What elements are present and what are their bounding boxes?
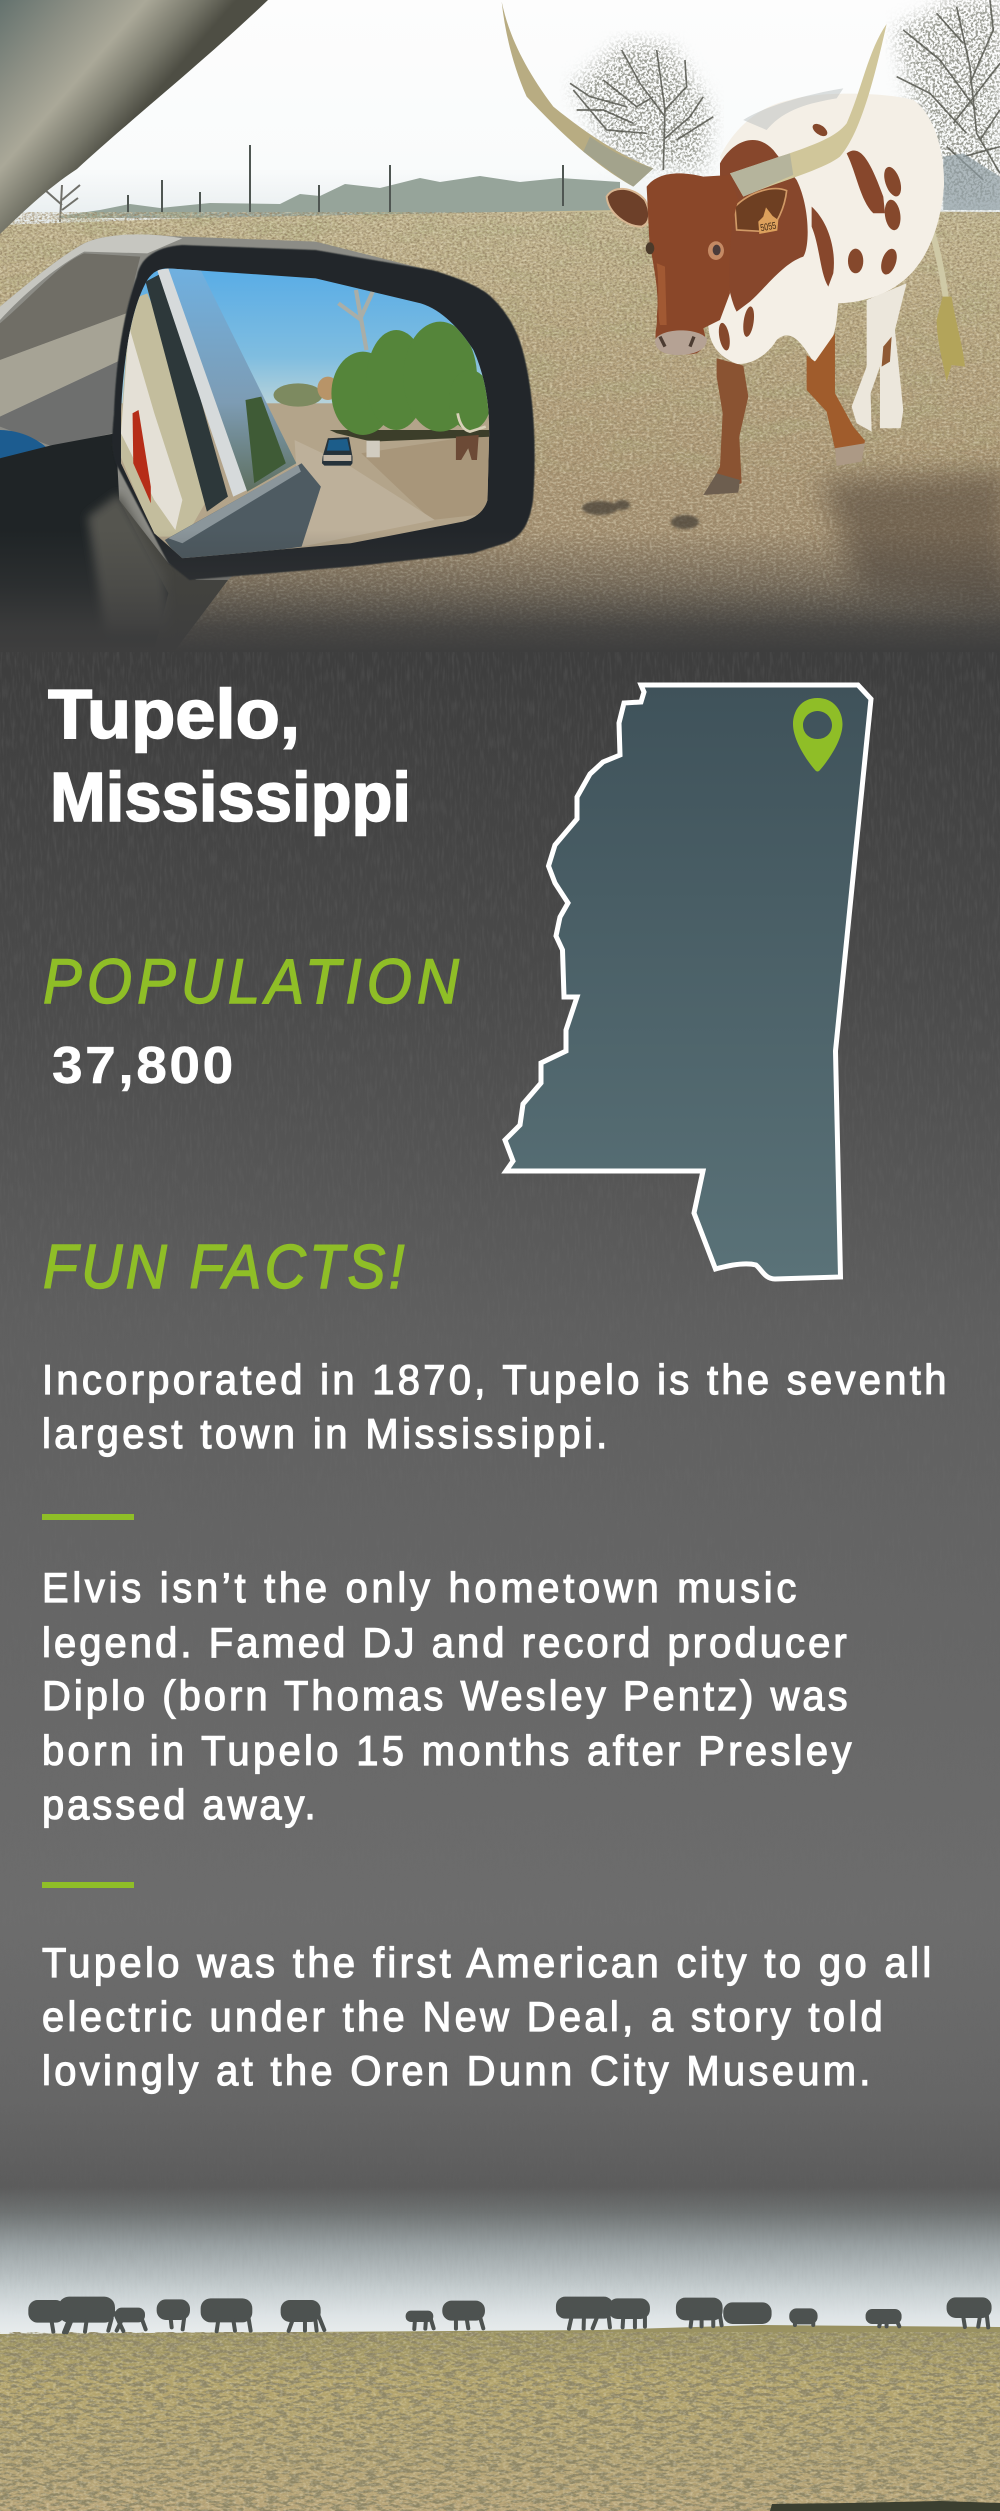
housing lower gray [0, 360, 121, 447]
bison 11 [676, 2298, 723, 2327]
population heading: POPULATION [43, 946, 459, 1017]
mirror frame [112, 245, 535, 580]
fact 2: Elvis isn’t the only hometown music [42, 1564, 796, 1611]
fun facts heading: FUN FACTS! [43, 1232, 405, 1302]
back legs [852, 283, 907, 432]
dark window strip [146, 272, 228, 512]
bison herd [28, 2297, 992, 2332]
car side window [168, 268, 296, 492]
blue trim [0, 430, 47, 458]
reflected blue car [322, 437, 352, 466]
shoulder patch [847, 150, 885, 213]
hide spots [717, 121, 904, 351]
distant building right [943, 153, 1000, 210]
cream car panel [119, 293, 207, 537]
bison 12 [723, 2302, 772, 2324]
icon: location pin [793, 698, 842, 772]
right horn base [730, 153, 793, 197]
white car panel [121, 327, 182, 530]
left horn [502, 2, 653, 187]
reflected sky [119, 267, 494, 417]
body [708, 94, 944, 364]
fact 2: born in Tupelo 15 months after Presley [42, 1727, 852, 1774]
population number: 37,800 [52, 1036, 233, 1095]
fact 1: largest town in Mississippi. [42, 1410, 607, 1457]
grass field [0, 210, 1000, 652]
fact 1: Incorporated in 1870, Tupelo is the seventh [42, 1356, 946, 1403]
nostrils [660, 337, 694, 347]
sky [0, 0, 1000, 225]
fact 2: legend. Famed DJ and record producer [42, 1619, 847, 1666]
front left hoof [703, 473, 740, 495]
map of Mississippi [505, 685, 871, 1279]
front right hoof [835, 443, 865, 466]
ear tag [758, 207, 778, 234]
side mirror [0, 234, 535, 650]
reflected longhorn [456, 413, 486, 460]
title: Tupelo, [48, 675, 300, 753]
neck patch [720, 140, 808, 312]
bison 13 [789, 2308, 818, 2325]
dark underside [0, 433, 168, 650]
prairie ground [0, 2325, 1000, 2511]
bottom photo: bison on prairie [0, 2297, 1000, 2511]
fact 2: passed away. [42, 1781, 316, 1828]
bison 5 [201, 2298, 252, 2331]
fact 2 [42, 1564, 852, 1828]
head [647, 173, 738, 355]
ear tag: 5055 [760, 221, 778, 234]
left horn base [583, 137, 653, 187]
tail tassel [937, 297, 965, 382]
bison 9 [556, 2297, 613, 2329]
mirror glass [119, 267, 494, 563]
bare tree foliage right [897, 0, 1000, 207]
distant tree line [60, 176, 620, 218]
underside gray [88, 493, 168, 633]
reflected ground [119, 403, 494, 563]
side stripe [812, 207, 834, 287]
reflected road [295, 440, 435, 547]
bison 10 [608, 2298, 650, 2327]
tail [932, 230, 946, 300]
bare tree behind cow [570, 50, 713, 170]
housing light band [0, 313, 126, 417]
housing rim highlight [0, 234, 182, 320]
front right leg [807, 333, 865, 457]
grass patches [0, 212, 1000, 472]
grass dark texture [0, 212, 1000, 652]
fact 2: Diplo (born Thomas Wesley Pentz) was [42, 1672, 848, 1719]
reflected distant trees [274, 383, 323, 407]
bison 7 [406, 2311, 434, 2329]
left ear [607, 189, 649, 227]
reflected hedge base [330, 430, 491, 442]
bare tree right [897, 0, 1000, 180]
dung piles [582, 500, 699, 529]
bison 1 [28, 2300, 68, 2332]
fact 3: lovingly at the Oren Dunn City Museum. [42, 2047, 870, 2094]
right ear [735, 189, 787, 232]
chrome strip [157, 268, 247, 497]
muzzle [655, 330, 707, 355]
left eye [646, 242, 654, 254]
fact 1 [42, 1356, 946, 1457]
prairie light texture [0, 2332, 1000, 2511]
car pillar [0, 0, 268, 234]
bison 14 [866, 2309, 902, 2326]
divider 2 [42, 1882, 134, 1888]
prairie dark specks [0, 2332, 1000, 2511]
fact 3: Tupelo was the first American city to go all [42, 1939, 931, 1986]
tree in car window [245, 397, 286, 483]
right horn [730, 24, 887, 197]
bison 6 [281, 2300, 324, 2331]
bison 4 [157, 2299, 190, 2329]
white post [366, 441, 380, 457]
housing bottom shade [119, 500, 228, 650]
title: Mississippi [50, 758, 411, 836]
fact 3 [42, 1939, 931, 2094]
background paper texture [2, 652, 1000, 1058]
bare tree foliage behind cow [573, 43, 710, 170]
housing shade [0, 253, 140, 360]
back leg marking [882, 337, 892, 367]
power poles [128, 145, 563, 212]
red reflector [133, 410, 151, 503]
dark bush at bottom edge [770, 2501, 1000, 2511]
bare tree in reflection [338, 290, 373, 350]
reflected field [361, 433, 491, 520]
longhorn cow [502, 0, 1000, 495]
small distant tree [45, 185, 80, 222]
mirror housing [0, 234, 456, 650]
bison 8 [442, 2301, 485, 2329]
gray back streak [743, 88, 843, 130]
reflected green trees [331, 322, 491, 435]
divider 1 [42, 1514, 134, 1520]
right eye [708, 241, 724, 260]
state outline [505, 685, 871, 1279]
grass light texture [0, 212, 1000, 652]
bison 15 [947, 2297, 992, 2327]
face highlight [657, 263, 667, 325]
car door [165, 463, 321, 563]
fact 3: electric under the New Deal, a story told [42, 1993, 883, 2040]
title [48, 675, 411, 836]
bison 2 [58, 2297, 123, 2332]
bison 3 [115, 2308, 146, 2331]
background panel with mist gradient [0, 640, 1000, 2340]
top photo: longhorn and car mirror [0, 0, 1000, 652]
front left leg [707, 358, 748, 493]
cow shadow on ground [820, 470, 1000, 610]
door sill highlight [168, 465, 301, 543]
photo fade into dark panel [0, 530, 1000, 652]
